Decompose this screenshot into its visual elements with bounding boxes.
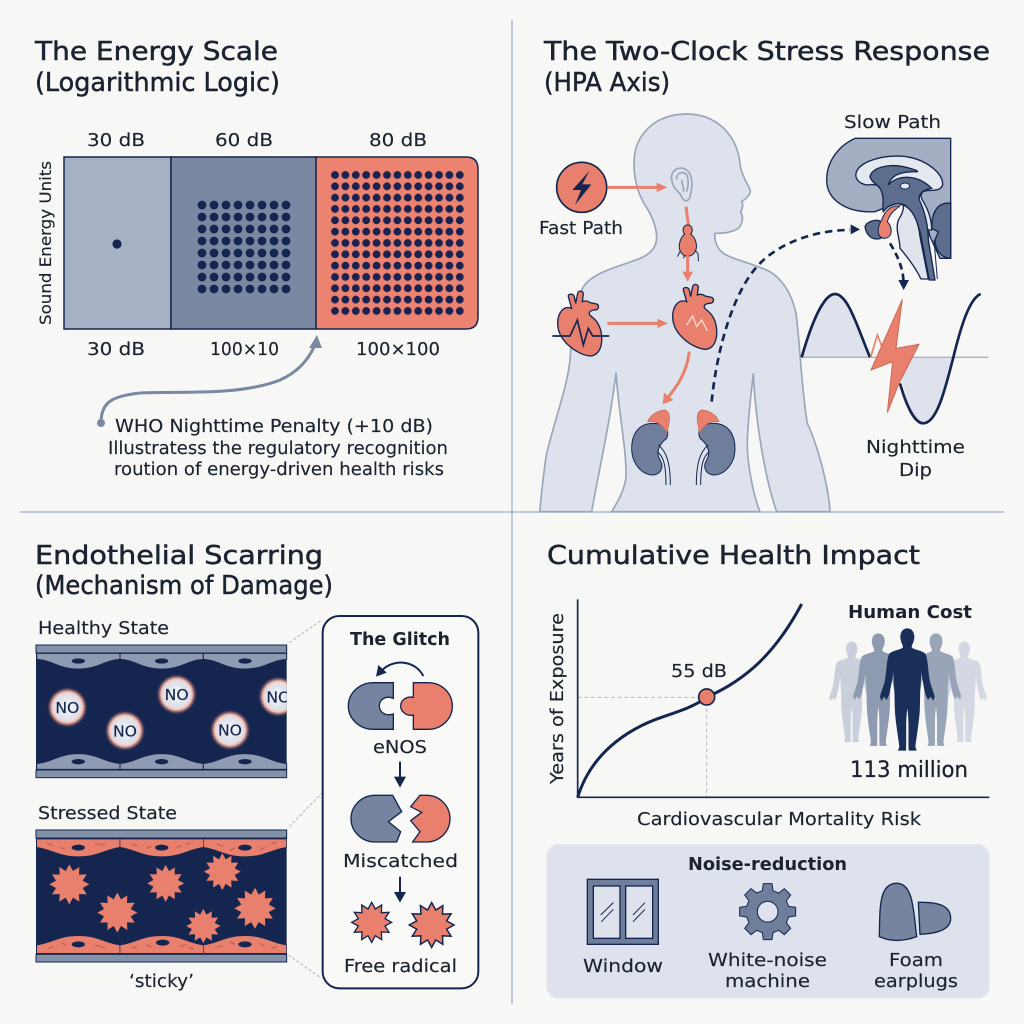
nitric oxide molecules: NO	[113, 722, 137, 740]
heading: the energy scale: The Energy Scale	[34, 37, 278, 67]
label: foam: Foam	[889, 950, 943, 971]
nitric oxide molecules: NO	[165, 686, 189, 704]
people: human cost silhouettes	[829, 628, 987, 751]
vessel: healthy state	[36, 645, 299, 778]
icon: foam earplugs	[879, 883, 951, 940]
label: noise-reduction: Noise-reduction	[688, 854, 847, 875]
arrow: swap	[376, 663, 423, 677]
panel: cumulative health impact	[547, 541, 989, 998]
card: the glitch	[323, 616, 478, 988]
chart: dose response curve	[578, 599, 989, 797]
label: white-noise: White-noise	[708, 950, 827, 971]
nitric oxide molecules: NO	[55, 699, 79, 717]
arrow: ganglion to heart	[682, 256, 693, 282]
energy bar: 60 dB cell	[171, 157, 316, 329]
label: fast path: Fast Path	[539, 218, 623, 239]
icon: window	[587, 879, 658, 944]
endothelial cells top	[37, 653, 287, 669]
label: earplugs: earplugs	[874, 971, 958, 992]
label: machine: machine	[725, 971, 810, 992]
arrow: down to free radicals	[394, 877, 406, 903]
label: x axis: Cardiovascular Mortality Risk	[637, 809, 922, 830]
icon: left kidney with adrenal	[632, 410, 670, 485]
label: 55 dB threshold: 55 dB	[671, 661, 727, 682]
icon: mismatched puzzle	[351, 795, 450, 842]
arrow: dashed kidney to brain	[712, 224, 860, 402]
bottom label 100 x 10: 100×10	[210, 339, 279, 360]
human silhouette	[540, 114, 830, 512]
label: eNOS: eNOS	[373, 737, 427, 758]
label: miscatched: Miscatched	[343, 851, 458, 872]
arrow: dashed brain to rhythm	[890, 243, 909, 290]
single energy dot	[112, 239, 122, 249]
label: healthy state: Healthy State	[38, 618, 169, 639]
label: sticky: ‘sticky’	[129, 971, 194, 992]
dot grid 13 by 13	[330, 169, 465, 317]
stat: 113 million: 113 million	[850, 758, 968, 783]
arrow: down to mismatch	[394, 762, 406, 788]
icon: fast path lightning	[557, 162, 607, 212]
free radicals in lumen	[49, 853, 276, 944]
panel: endothelial scarring	[35, 541, 478, 992]
callout text line 2: Illustratess the regulatory recognition	[108, 438, 448, 459]
subheading: mechanism of damage: (Mechanism of Damage)	[35, 571, 333, 601]
inflamed cells top	[37, 839, 287, 857]
icon: free radicals	[352, 902, 454, 947]
icon: nighttime disruption lightning	[871, 299, 919, 413]
subheading: HPA axis: (HPA Axis)	[544, 68, 670, 98]
nitric oxide molecules: NO	[266, 688, 290, 706]
heading: two-clock stress response: The Two-Clock Stress Response	[543, 37, 990, 67]
icon: right kidney with adrenal	[696, 410, 735, 485]
chart: circadian rhythm wave	[802, 294, 988, 423]
subheading: logarithmic logic: (Logarithmic Logic)	[35, 68, 280, 98]
panel: two-clock stress response	[539, 37, 990, 512]
arrow: ear to ganglion	[686, 207, 689, 227]
dot grid 8 by 8	[196, 199, 292, 295]
energy bar: 80 dB cell	[316, 157, 478, 329]
arrow: heart to kidneys	[663, 352, 689, 404]
nitric oxide molecules	[47, 674, 299, 751]
icon: stressed heart left	[552, 291, 609, 356]
card: noise-reduction background	[547, 844, 989, 998]
heading: endothelial scarring: Endothelial Scarring	[35, 541, 323, 571]
inflamed cells bottom	[37, 936, 287, 953]
arrow: lightning to ear	[607, 183, 667, 192]
icon: matched eNOS puzzle	[348, 683, 452, 729]
nitric oxide molecules: NO	[218, 722, 242, 740]
bottom label 30 dB: 30 dB	[87, 339, 145, 360]
connector lines to glitch card	[288, 620, 322, 978]
endothelial cells bottom	[37, 754, 287, 769]
icon: ear	[671, 168, 692, 201]
callout text line 3: roution of energy-driven health risks	[114, 459, 444, 480]
label: nighttime: Nighttime	[866, 437, 965, 458]
label: dip: Dip	[899, 460, 932, 481]
body illustration	[540, 114, 988, 512]
label: window: Window	[583, 956, 663, 977]
arrow: heart to heart	[607, 319, 668, 328]
callout text: WHO nighttime penalty: WHO Nighttime Penalty (+10 dB)	[115, 416, 433, 437]
icon: brain cross-section	[827, 138, 951, 280]
label: human cost: Human Cost	[848, 602, 972, 623]
heading: cumulative health impact: Cumulative Health Impact	[547, 541, 920, 571]
energy bar: 30 dB cell	[64, 157, 171, 329]
top label 60 dB: 60 dB	[215, 130, 273, 151]
vessel: stressed state	[36, 830, 287, 962]
label: y axis: Years of Exposure	[547, 613, 568, 785]
icon: ganglion	[677, 225, 699, 261]
panel: the energy scale	[34, 37, 478, 480]
label: slow path: Slow Path	[844, 112, 941, 133]
icon: heart centre	[673, 284, 717, 349]
card heading: the glitch: The Glitch	[350, 629, 450, 650]
top label 80 dB: 80 dB	[369, 130, 427, 151]
label: stressed state: Stressed State	[38, 803, 177, 824]
top label 30 dB: 30 dB	[87, 130, 145, 151]
bottom label 100 x 100: 100×100	[356, 339, 440, 360]
y axis label: Sound Energy Units	[36, 161, 55, 325]
label: free radical: Free radical	[344, 956, 457, 977]
arrow: WHO penalty pointer	[97, 335, 322, 427]
icon: gear white-noise machine	[740, 884, 796, 940]
